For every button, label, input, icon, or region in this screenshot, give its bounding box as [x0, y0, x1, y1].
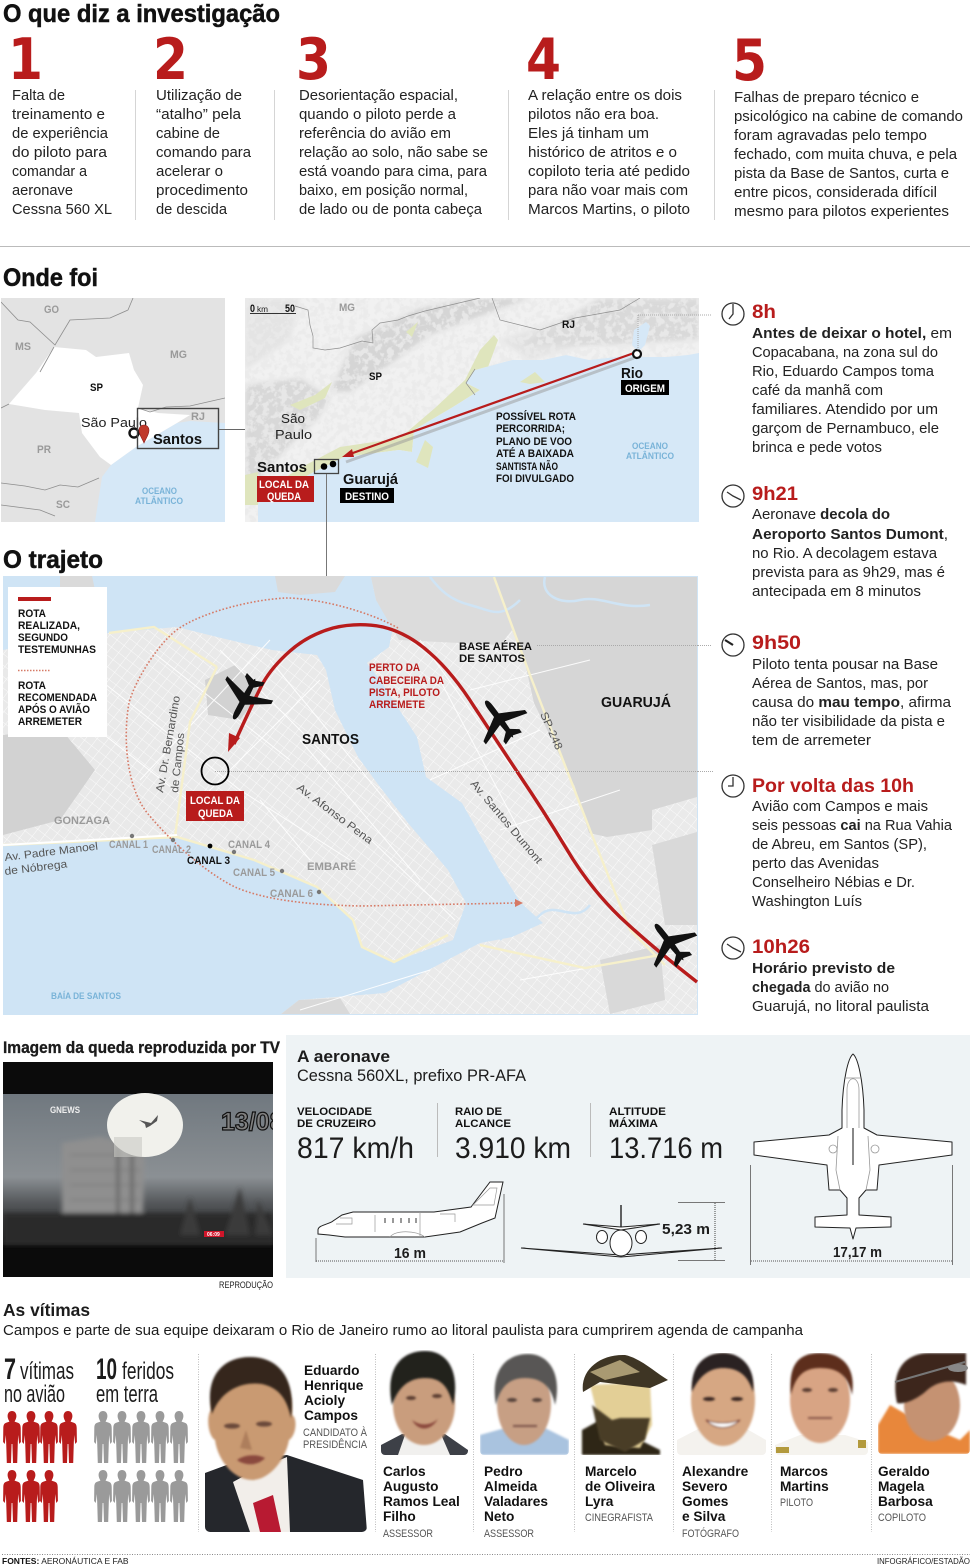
finding 1 [8, 27, 112, 218]
dimension: length: 16 m [394, 1245, 426, 1262]
legend: ROTA [18, 608, 46, 620]
portrait: Alexandre Silva [677, 1353, 766, 1455]
finding 5: mesmo para pilotos experientes [734, 203, 949, 220]
finding 3: está voando para cima, para [299, 163, 488, 180]
text: Marcos Martins [780, 1464, 829, 1509]
stat: cruise speed: DE CRUZEIRO [297, 1118, 376, 1130]
timeline: 9h50 [722, 633, 952, 749]
subtitle: Campos e parte de sua equipe deixaram o Rio de Janeiro rumo ao litoral paulista para cumprirem agenda de campanha [3, 1322, 804, 1339]
map labels: MG [170, 349, 187, 361]
stat: ceiling: 13.716 m [609, 1132, 723, 1165]
legend: SEGUNDO [18, 632, 68, 644]
finding 5 [732, 28, 963, 220]
map labels: RJ [191, 411, 205, 423]
street and place labels: CANAL 3 [187, 855, 230, 867]
text: Alexandre Silva: FOTÓGRAFO [682, 1527, 739, 1540]
portrait: Marcos Martins [775, 1353, 868, 1455]
map: São Paulo state [1, 298, 225, 522]
drawing: front view [521, 1205, 722, 1257]
finding 4: 4 [526, 27, 561, 93]
icon: airplane approaching [654, 924, 698, 968]
finding 4: pilotos não era boa. [528, 106, 659, 123]
text: Alexandre Silva: Severo [682, 1479, 728, 1494]
callout: near the runway: ARREMETE [369, 699, 425, 711]
timeline: 9h21 [722, 484, 948, 600]
finding 3: referência do avião em [299, 125, 451, 142]
finding 5: pista da Base de Santos, curta e [734, 165, 949, 182]
map labels: SP [369, 371, 382, 383]
timeline: 8h: garçom de Pernambuco, ele [752, 420, 939, 437]
stat: ceiling: ALTITUDE [609, 1106, 666, 1118]
text: Geraldo Barbosa: COPILOTO [878, 1512, 926, 1524]
finding 2: de descida [156, 201, 228, 218]
street and place labels: CANAL 5 [233, 867, 275, 879]
locator box: Santos: Santos [153, 432, 202, 448]
finding 1: treinamento e [12, 106, 105, 123]
text: Carlos Leal: Augusto [383, 1479, 438, 1494]
finding 2: acelerar o [156, 163, 223, 180]
legend: ARREMETER [18, 716, 82, 728]
text: Eduardo Campos: PRESIDÊNCIA [303, 1438, 368, 1451]
stat: range: RAIO DE [455, 1106, 502, 1118]
finding 4: histórico de atritos e o [528, 144, 677, 161]
tag: crash site: LOCAL DA [190, 795, 240, 807]
timeline: 10h26: Guarujá, no litoral paulista [752, 998, 930, 1015]
dimension: height [662, 1202, 725, 1260]
text: Eduardo Campos: Henrique [304, 1378, 364, 1393]
finding 4: para não voar mais com [528, 182, 688, 199]
street and place labels: CANAL 4 [228, 839, 271, 851]
portrait: Carlos Leal [381, 1351, 468, 1455]
text: Pedro Valadares [484, 1464, 548, 1540]
street and place labels: de Nóbrega [4, 858, 69, 878]
callout: near the runway: PERTO DA [369, 662, 420, 674]
finding 4: Eles já tinham um [528, 125, 649, 142]
timeline: 8h: Antes de deixar o hotel, em [752, 325, 952, 342]
locator box: Santos [138, 408, 218, 448]
finding 2: comando para [156, 144, 252, 161]
icon: airplane over Santos [225, 673, 274, 720]
finding 3: relação ao solo, não sabe se [299, 144, 488, 161]
street and place labels: Av. Afonso Pena [294, 782, 376, 847]
text: Marcos Martins: Marcos [780, 1464, 828, 1479]
street and place labels: Av. Dr. Bernardino [154, 695, 183, 794]
text: Pedro Valadares: Valadares [484, 1494, 548, 1509]
stat: range [455, 1106, 571, 1165]
timeline: around 10h: Por volta das 10h [752, 776, 914, 797]
finding 3: quando o piloto perde a [299, 106, 457, 123]
timeline: 8h: 8h [752, 302, 776, 323]
heading: TV image: Imagem da queda reproduzida por TV [3, 1038, 281, 1057]
heading: O que diz a investigação: O que diz a investigação [3, 0, 280, 28]
timeline: 10h26 [722, 937, 930, 1015]
street and place labels: SANTOS [302, 732, 359, 748]
map: Rio to Santos coast [245, 298, 699, 522]
text: Marcelo Lyra: Lyra [585, 1494, 614, 1509]
text: Alexandre Silva [682, 1464, 749, 1540]
finding 3 [296, 27, 488, 218]
text: Marcos Martins: PILOTO [780, 1497, 813, 1509]
text: Geraldo Barbosa: Barbosa [878, 1494, 933, 1509]
stat: cruise speed: VELOCIDADE [297, 1106, 372, 1118]
text: Geraldo Barbosa: Magela [878, 1479, 925, 1494]
text: Carlos Leal: Ramos Leal [383, 1494, 460, 1509]
stat: 7 victims on the plane: 7 [4, 1353, 16, 1386]
finding 3: baixo, em posição normal, [299, 182, 468, 199]
timeline: 9h50: Aérea de Santos, mas, por [752, 675, 928, 692]
map labels [15, 304, 205, 511]
timeline: around 10h: Avião com Campos e mais [752, 798, 928, 815]
tag: Destino: DESTINO [345, 491, 389, 503]
route note: SANTISTA NÃO [496, 460, 558, 473]
street and place labels: de Campos [169, 732, 187, 793]
timeline: 8h: brinca e pede votos [752, 439, 882, 456]
video still: GNEWS [50, 1105, 80, 1115]
tag: Local da queda [257, 476, 314, 503]
stat: 10 injured on the ground [96, 1353, 174, 1408]
tag: Local da queda: QUEDA [267, 491, 301, 503]
legend: APÓS O AVIÃO [18, 703, 90, 716]
text: Eduardo Campos: CANDIDATO À [303, 1426, 368, 1439]
street and place labels: BAÍA DE SANTOS [51, 991, 121, 1001]
text: Marcos Martins: Martins [780, 1479, 829, 1494]
text: Eduardo Campos: Eduardo [304, 1363, 360, 1378]
stat: 10 injured on the ground: em terra [96, 1381, 158, 1408]
route arrow [342, 353, 634, 462]
panel: aircraft: A aeronave [297, 1047, 390, 1066]
timeline: 9h50: Piloto tenta pousar na Base [752, 656, 938, 673]
text: Alexandre Silva: Gomes [682, 1494, 729, 1509]
map labels: MG [339, 302, 355, 314]
timeline: 10h26: Horário previsto de [752, 960, 895, 977]
stat: 7 victims on the plane: vítimas [20, 1358, 74, 1385]
text: Geraldo Barbosa [878, 1464, 933, 1524]
legend: TESTEMUNHAS [18, 644, 96, 656]
map labels: Santos [257, 460, 307, 476]
finding 5: fechado, com muita chuva, e pela [734, 146, 958, 163]
tag: crash site: QUEDA [198, 808, 233, 820]
red actual route [228, 625, 697, 982]
scale bar: km [257, 305, 268, 314]
text: Marcelo Lyra: Marcelo [585, 1464, 637, 1479]
locator box: Santos and Guarujá [314, 460, 338, 474]
finding 4: copiloto teria até pedido [528, 163, 690, 180]
route note: PERCORRIDA; [496, 423, 565, 435]
text: Carlos Leal: Filho [383, 1509, 416, 1524]
video still: 06:09 [207, 1232, 220, 1238]
finding 1: comandar a [12, 163, 88, 180]
timeline: 9h50: causa do mau tempo, afirma [752, 694, 952, 711]
finding 3: Desorientação espacial, [299, 87, 458, 104]
tag: Origem: ORIGEM [625, 383, 665, 395]
timeline: 9h50: não ter visibilidade da pista e [752, 713, 945, 730]
finding 1: do piloto para [12, 144, 108, 161]
timeline: 9h50: 9h50 [752, 633, 801, 654]
finding 2: 2 [153, 27, 188, 93]
timeline: 9h21: Aeronave decola do [752, 506, 890, 523]
finding 5: psicológico na cabine de comando [734, 108, 963, 125]
stat: range: ALCANCE [455, 1118, 511, 1130]
finding 5: Falhas de preparo técnico e [734, 89, 919, 106]
map labels: São [281, 411, 305, 426]
timeline: 9h21: no Rio. A decolagem estava [752, 545, 938, 562]
text: Alexandre Silva: e Silva [682, 1509, 726, 1524]
finding 2: cabine de [156, 125, 220, 142]
callout: near the runway [369, 662, 444, 711]
timeline: 9h21: prevista para as 9h29, mas é [752, 564, 945, 581]
finding 1: de experiência [12, 125, 109, 142]
portrait: Geraldo Barbosa [878, 1353, 970, 1454]
street and place labels: CANAL 6 [270, 888, 313, 900]
timeline: 10h26: chegada do avião no [752, 979, 889, 996]
finding 3: de lado ou de ponta cabeça [299, 201, 483, 218]
street and place labels: GUARUJÁ [601, 694, 672, 711]
stat: ceiling [609, 1106, 723, 1165]
map labels: São Paulo [81, 415, 147, 430]
photo credit: REPRODUÇÃO [219, 1280, 273, 1290]
timeline: 9h21: Aeroporto Santos Dumont, [752, 526, 948, 543]
stat: 7 victims on the plane: no avião [4, 1381, 65, 1408]
map labels: Guarujá [343, 472, 399, 488]
timeline: around 10h: de Abreu, em Santos (SP), [752, 836, 927, 853]
text: Carlos Leal [383, 1464, 460, 1540]
text: Carlos Leal: ASSESSOR [383, 1528, 433, 1540]
finding 2: procedimento [156, 182, 248, 199]
tag: crash site [186, 791, 244, 821]
timeline: 9h50: tem de arremeter [752, 732, 871, 749]
finding 2: “atalho” pela [156, 106, 242, 123]
finding 1: aeronave [12, 182, 73, 199]
scale bar: 0 [250, 303, 255, 315]
stat: cruise speed [297, 1106, 414, 1165]
panel: aircraft: Cessna 560XL, prefixo PR-AFA [297, 1067, 526, 1085]
dimension: height: 5,23 m [662, 1221, 710, 1238]
text: Alexandre Silva: Alexandre [682, 1464, 749, 1479]
street and place labels: Av. Padre Manoel [4, 841, 99, 864]
marker: Rio origin [633, 315, 712, 358]
route note: POSSÍVEL ROTA [496, 410, 576, 423]
map labels: ATLÂNTICO [626, 450, 674, 461]
callout: near the runway: PISTA, PILOTO [369, 687, 440, 699]
street and place labels: GONZAGA [54, 815, 110, 827]
timeline: around 10h: seis pessoas cai na Rua Vahia [752, 817, 953, 834]
scale bar [250, 304, 296, 314]
text: Marcelo Lyra: de Oliveira [585, 1479, 655, 1494]
finding 5: foram agravadas pelo tempo [734, 127, 927, 144]
finding 4: Marcos Martins, o piloto [528, 201, 690, 218]
panel: aircraft [286, 1035, 970, 1278]
drawing: top view [754, 1054, 952, 1239]
timeline: 8h: Copacabana, na zona sul do [752, 344, 938, 361]
heading: O trajeto: O trajeto [3, 546, 103, 574]
finding 3: 3 [296, 27, 331, 93]
finding 5: entre picos, considerada difícil [734, 184, 937, 201]
dotted recommended route [126, 598, 523, 907]
text: Eduardo Campos: Campos [304, 1408, 358, 1423]
icon: origin star and Santos pin [130, 425, 149, 443]
pictogram: red people [3, 1411, 77, 1522]
street and place labels [4, 640, 672, 1001]
timeline: 8h [722, 302, 952, 456]
finding 4: A relação entre os dois [528, 87, 682, 104]
map labels: PR [37, 444, 51, 456]
stat: 10 injured on the ground: 10 [96, 1353, 117, 1386]
timeline: 8h: Rio, Eduardo Campos toma [752, 363, 935, 380]
map labels: MS [15, 341, 31, 353]
timeline: 8h: familiares. Atendido por um [752, 401, 938, 418]
route note [496, 410, 576, 485]
dimension: wingspan: 17,17 m [833, 1244, 882, 1261]
street and place labels: BASE AÉREA [459, 640, 532, 653]
map labels: SP [90, 382, 103, 394]
legend: ROTA [18, 680, 46, 692]
street and place labels: Av. Santos Dumont [468, 778, 544, 866]
timeline: around 10h: perto das Avenidas [752, 855, 879, 872]
text: Pedro Valadares: ASSESSOR [484, 1528, 534, 1540]
map labels: Paulo [275, 427, 312, 442]
legend: REALIZADA, [18, 620, 80, 632]
stat: cruise speed: 817 km/h [297, 1132, 414, 1165]
map labels [257, 302, 674, 488]
callout: near the runway: CABECEIRA DA [369, 675, 444, 687]
street and place labels: SP-248 [537, 710, 564, 752]
finding 2 [153, 27, 252, 218]
text: Pedro Valadares: Almeida [484, 1479, 538, 1494]
map labels: SC [56, 499, 70, 511]
finding 4 [526, 27, 690, 218]
portrait: Marcelo Lyra [582, 1355, 668, 1455]
heading: As vítimas: As vítimas [3, 1300, 90, 1320]
street and place labels: EMBARÉ [307, 860, 356, 873]
street and place labels: CANAL 1 [109, 839, 148, 851]
tag: Local da queda: LOCAL DA [259, 479, 309, 491]
legend: RECOMENDADA [18, 692, 97, 704]
text: Pedro Valadares: Neto [484, 1509, 514, 1524]
text: Carlos Leal: Carlos [383, 1464, 426, 1479]
finding 1: 1 [8, 27, 43, 93]
legend [8, 587, 107, 737]
map labels: OCEANO [142, 486, 177, 496]
map labels: RJ [562, 319, 575, 331]
map labels: ATLÂNTICO [135, 495, 183, 506]
street and place labels: CANAL 2 [152, 844, 191, 856]
icon: airplane at the runway [484, 700, 528, 744]
timeline: around 10h: Washington Luís [752, 893, 862, 910]
video still: 13/08 [221, 1108, 284, 1136]
text: Marcelo Lyra: CINEGRAFISTA [585, 1512, 654, 1524]
stat: 10 injured on the ground: feridos [122, 1358, 174, 1385]
map: Santos flight path [3, 576, 705, 1015]
timeline: 9h21: 9h21 [752, 484, 798, 505]
text: Geraldo Barbosa: Geraldo [878, 1464, 930, 1479]
text: Eduardo Campos: Acioly [304, 1393, 345, 1408]
finding 2: Utilização de [156, 87, 242, 104]
timeline: around 10h: Conselheiro Nébias e Dr. [752, 874, 915, 891]
street and place labels: DE SANTOS [459, 653, 525, 665]
stat: ceiling: MÁXIMA [609, 1117, 658, 1130]
portrait: Pedro Valadares [480, 1354, 569, 1455]
scale bar: 50 [285, 303, 295, 315]
stat: range: 3.910 km [455, 1132, 571, 1165]
finding 5: 5 [732, 28, 767, 94]
map labels: Rio [621, 366, 643, 382]
drawing: side view [318, 1182, 503, 1237]
finding 1: Cessna 560 XL [12, 201, 112, 218]
route note: PLANO DE VOO [496, 436, 572, 448]
map labels: GO [44, 304, 59, 316]
timeline: around 10h [722, 775, 953, 910]
text: Pedro Valadares: Pedro [484, 1464, 523, 1479]
timeline: 10h26: 10h26 [752, 937, 810, 958]
text: Marcelo Lyra [585, 1464, 655, 1524]
heading: Onde foi: Onde foi [3, 264, 98, 292]
pictogram: gray people [94, 1411, 188, 1522]
text: Eduardo Campos [303, 1363, 368, 1451]
stat: 7 victims on the plane [4, 1353, 74, 1408]
timeline: 9h21: antecipada em 8 minutos [752, 583, 921, 600]
route note: ATÉ A BAIXADA [496, 447, 574, 460]
map labels: OCEANO [632, 441, 668, 451]
route note: FOI DIVULGADO [496, 473, 574, 485]
finding 1: Falta de [12, 87, 65, 104]
video still [3, 1062, 284, 1277]
portrait: Eduardo Campos [205, 1357, 367, 1532]
timeline: 8h: café da manhã com [752, 382, 883, 399]
